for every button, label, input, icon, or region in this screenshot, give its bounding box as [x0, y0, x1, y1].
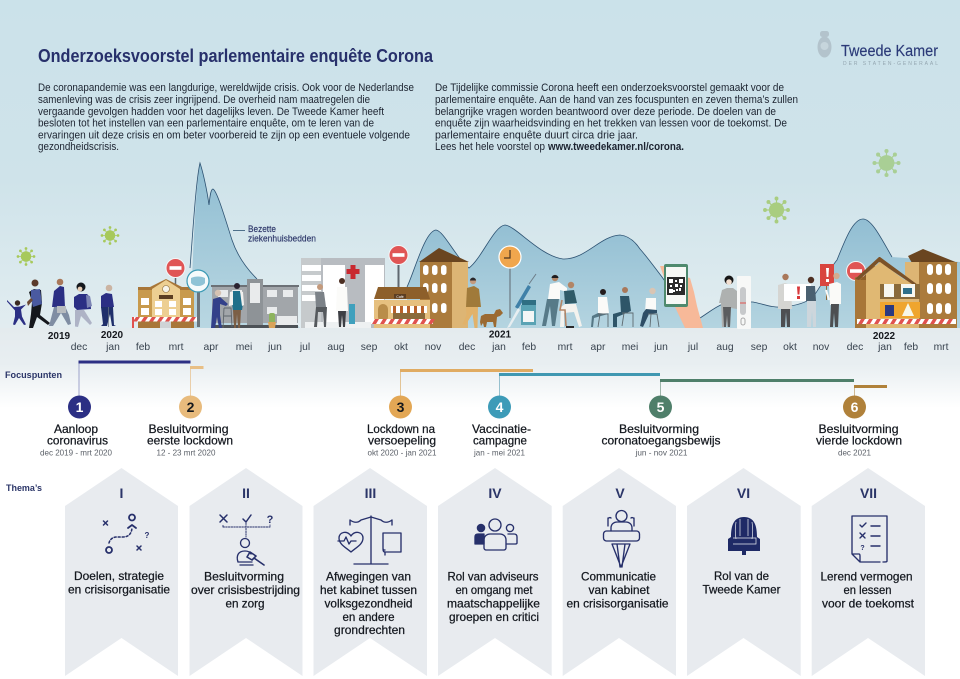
timeline years and months: jun: [267, 342, 282, 353]
timeline years and months: jul: [299, 342, 310, 353]
timeline years and months: mrt: [169, 342, 184, 353]
focuspunt 3: [367, 369, 533, 458]
intro text left: ervaringen uit deze crisis en om beter voorbereid te zijn op een eventuele volgende: [38, 129, 410, 141]
label: Bezette ziekenhuisbedden: Bezette: [248, 224, 276, 235]
title: Onderzoeksvoorstel parlementaire enquête Corona: [38, 46, 434, 66]
timeline years and months: 2021: [489, 330, 512, 340]
timeline years and months: jan: [877, 342, 892, 353]
timeline years and months: jan: [105, 342, 120, 353]
intro text right: belangrijke vragen worden beantwoord over deze periode. De doelen van de: [435, 106, 776, 118]
hospital beds waves 2-6: [407, 219, 960, 328]
cafe with no entry sign: [371, 246, 469, 328]
people walking: [7, 279, 116, 328]
panel: thema I: I: [120, 485, 123, 501]
panel: thema I: [65, 468, 178, 676]
intro text left: samenleving was de crisis zeer ingrijpend. De overheid nam maatregelen die: [38, 94, 370, 106]
focuspunt 5: jun - nov 2021: [634, 448, 688, 458]
thema's heading: Thema’s: [6, 483, 42, 493]
panel: thema V: [563, 468, 676, 676]
timeline years and months: okt: [394, 342, 408, 353]
icon: advisers group: [475, 519, 517, 550]
panel: thema VI: Tweede Kamer: [702, 582, 780, 596]
focuspunt 4: [472, 373, 660, 458]
timeline years and months: aug: [327, 342, 345, 353]
icon: lectern speaker: [604, 510, 640, 567]
sign: face mask: [187, 270, 209, 327]
panel: thema V: en crisisorganisatie: [566, 596, 669, 610]
focuspunt 2: 2: [187, 399, 195, 415]
hospital beds wave 1: [190, 163, 300, 328]
timeline years and months: apr: [591, 342, 606, 353]
timeline years and months: mrt: [934, 342, 949, 353]
woman: [74, 282, 92, 327]
focuspunt 6: dec 2021: [838, 448, 871, 458]
icon: checklist: ?: [860, 545, 865, 552]
sign: no entry: [389, 246, 408, 288]
covid self-test: [737, 276, 751, 329]
icon: strategy: [104, 514, 150, 553]
intro text left: De coronapandemie was een langdurige, wereldwijde crisis. Ook voor de Nederlandse: [38, 82, 414, 94]
timeline years and months: [48, 330, 949, 353]
barrier tape: [857, 319, 956, 324]
timeline years and months: feb: [522, 342, 536, 353]
panel: thema VI: Rol van de: [714, 569, 769, 583]
logo: Tweede Kamer: DER STATEN-GENERAAL: [843, 61, 938, 67]
icon: decision making: [220, 514, 274, 565]
timeline years and months: sep: [751, 342, 768, 353]
timeline years and months: mrt: [558, 342, 573, 353]
timeline years and months: dec: [71, 342, 87, 353]
cafe: Café: [396, 295, 404, 299]
man walking dog: [462, 278, 503, 328]
timeline years and months: aug: [716, 342, 734, 353]
intro text right: parlementaire enquête duurt circa drie jaar.: [435, 129, 638, 141]
focuspunt 3: versoepeling: [368, 434, 436, 448]
timeline years and months: feb: [904, 342, 918, 353]
intro text right: [435, 82, 798, 153]
panel: thema VI: VI: [737, 485, 750, 501]
school building: [138, 279, 194, 328]
panel: thema IV: groepen en critici: [449, 610, 539, 624]
protesters: [778, 264, 841, 327]
panel: thema I: en crisisorganisatie: [68, 582, 170, 596]
panel: thema III: het kabinet tussen: [320, 583, 417, 597]
timeline years and months: mei: [236, 342, 252, 353]
panel: thema I: Doelen, strategie: [74, 569, 164, 583]
focuspunt 1: 1: [76, 399, 84, 415]
focuspunt 1: coronavirus: [47, 434, 108, 448]
logo: Tweede Kamer: Tweede Kamer: [841, 43, 938, 60]
panel: thema VII: voor de toekomst: [822, 596, 915, 610]
panel: thema V: Communicatie: [581, 570, 656, 584]
intro text right: enquête zijn waarheidsvinding en het trekken van lessen voor de toekomst. De: [435, 118, 787, 130]
focuspunt 5: coronatoegangsbewijs: [602, 434, 720, 448]
viruses: [17, 150, 900, 265]
timeline years and months: dec: [459, 342, 475, 353]
intro text right: Lees het hele voorstel op: [435, 141, 545, 153]
timeline years and months: mei: [622, 342, 638, 353]
panel: thema VII: en lessen: [844, 583, 892, 597]
focuspunt 3: Lockdown na: [367, 422, 435, 436]
tall brown building: [419, 248, 469, 328]
focuspunt 5: [602, 379, 854, 458]
dog: [480, 309, 503, 327]
sign: clock: [499, 246, 521, 318]
label: Bezette ziekenhuisbedden: [233, 224, 316, 244]
phone with QR code and hand: [660, 264, 703, 328]
panel: thema VII: [812, 468, 925, 676]
focuspunt 2: eerste lockdown: [147, 434, 233, 448]
intro text right: parlementaire enquête. Aan de hand van zes focuspunten en zeven thema’s zullen: [435, 94, 798, 106]
woman with test: [719, 276, 751, 329]
panel: thema IV: IV: [488, 485, 502, 501]
protester with board: [778, 274, 811, 327]
timeline years and months: feb: [136, 342, 150, 353]
icon: decision making: ?: [267, 514, 274, 526]
syringe and vial: [507, 274, 536, 328]
protester woman: [806, 277, 816, 327]
panel: thema II: II: [242, 485, 250, 501]
intro text left: vergaande gevolgen hadden voor het dagelijks leven. De Tweede Kamer heeft: [38, 106, 384, 118]
intro text left: besloten tot het instellen van een parlementaire enquête, om te leren van de: [38, 118, 374, 130]
panel: thema III: [314, 468, 427, 676]
timeline years and months: sep: [361, 342, 378, 353]
logo: Tweede Kamer: [818, 31, 938, 67]
protester with sign: [820, 264, 841, 327]
elderly woman: [101, 285, 116, 327]
barrier tape: [132, 317, 198, 328]
nurse: [542, 275, 567, 326]
timeline years and months: nov: [425, 342, 442, 353]
timeline years and months: 2020: [101, 330, 124, 341]
icon: coat of arms: [818, 31, 832, 58]
focuspunt 1: dec 2019 - mrt 2020: [40, 448, 112, 458]
timeline years and months: nov: [813, 342, 830, 353]
focuspunt 6: vierde lockdown: [816, 434, 902, 448]
child: [7, 300, 26, 325]
timeline years and months: okt: [783, 342, 797, 353]
panel: thema II: en zorg: [226, 596, 264, 610]
icon: virus 4: [873, 150, 900, 176]
panel: thema IV: maatschappelijke: [447, 596, 540, 610]
focuspunt 2: Besluitvorming: [148, 422, 228, 436]
timeline years and months: jul: [687, 342, 698, 353]
label: Bezette ziekenhuisbedden: ziekenhuisbedden: [248, 234, 316, 244]
panel: thema III: en andere: [342, 610, 395, 624]
focuspunt 4: jan - mei 2021: [473, 448, 525, 458]
vaccination scene: [542, 275, 659, 327]
panel: thema III: III: [365, 485, 376, 501]
icon: virus 3: [764, 197, 789, 223]
intro text right: www.tweedekamer.nl/corona.: [547, 141, 684, 153]
timeline years and months: jan: [491, 342, 506, 353]
ground strip: [0, 328, 960, 408]
school with sign: [132, 258, 209, 328]
icon: checklist: [852, 516, 887, 562]
panel: thema III: grondrechten: [334, 623, 405, 637]
seated man: [613, 287, 633, 327]
barrier tape: [371, 319, 435, 324]
intro text right: De Tijdelijke commissie Corona heeft een onderzoeksvoorstel gemaakt voor de: [435, 82, 784, 94]
icon: virus 2: [101, 227, 119, 244]
seated woman: [591, 289, 609, 327]
elderly man with walker and carer: [211, 283, 244, 328]
panel: thema VII: VII: [860, 485, 877, 501]
focuspunt 2: [147, 366, 233, 458]
panel: thema V: van kabinet: [588, 583, 650, 597]
focuspunt 6: 6: [851, 399, 859, 415]
panel: thema VII: Lerend vermogen: [820, 570, 912, 584]
focuspunt 4: 4: [496, 399, 504, 415]
patient: [560, 282, 582, 327]
timeline years and months: 2022: [873, 331, 896, 342]
icon: virus 1: [17, 248, 35, 265]
hospital: [301, 258, 385, 328]
intro text left: [38, 82, 414, 153]
houses in lockdown: [855, 249, 958, 328]
panel: thema IV: en omgang met: [456, 583, 533, 597]
focuspunten heading: Focuspunten: [5, 370, 62, 380]
panel: thema II: over crisisbestrijding: [191, 583, 300, 597]
seated older man: [640, 288, 659, 327]
focuspunt 4: Vaccinatie-: [472, 422, 531, 436]
sign: no entry: [166, 258, 185, 290]
sign: no entry lockdown: [846, 262, 866, 280]
panel: thema VI: [687, 468, 801, 676]
focuspunt 4: campagne: [473, 434, 527, 448]
timeline years and months: apr: [204, 342, 219, 353]
panel: thema III: Afwegingen van: [326, 570, 411, 584]
panel: thema II: [190, 468, 302, 676]
man with phone: [27, 280, 50, 328]
focuspunt 3: 3: [397, 399, 405, 415]
focuspunt 2: 12 - 23 mrt 2020: [156, 448, 216, 458]
focuspunt 1: Aanloop: [54, 422, 98, 436]
focuspunt 6: [816, 385, 902, 458]
focuspunt 5: Besluitvorming: [619, 422, 699, 436]
focuspunt 5: 5: [657, 399, 665, 415]
icon: scale with heart and book: [338, 516, 401, 564]
timeline years and months: dec: [847, 342, 863, 353]
focuspunt 6: Besluitvorming: [818, 422, 898, 436]
panel: thema IV: [438, 468, 552, 676]
icon: strategy: ?: [145, 531, 150, 540]
walking man: [49, 279, 71, 326]
focuspunt 3: okt 2020 - jan 2021: [368, 448, 437, 458]
icon: armchair: [728, 517, 760, 555]
panel: thema V: V: [615, 485, 625, 501]
patient and doctor: [314, 278, 355, 327]
chart: bezette ziekenhuisbedden: [190, 163, 960, 328]
timeline years and months: 2019: [48, 331, 71, 342]
grey office building: [211, 279, 299, 328]
panel: thema IV: Rol van adviseurs: [448, 570, 538, 584]
panel: thema III: volksgezondheid: [324, 596, 412, 610]
focuspunt 1: [40, 360, 190, 458]
panel: thema II: Besluitvorming: [204, 570, 284, 584]
timeline years and months: jun: [653, 342, 668, 353]
background sky: [0, 0, 960, 328]
intro text left: gezondheidscrisis.: [38, 141, 119, 153]
